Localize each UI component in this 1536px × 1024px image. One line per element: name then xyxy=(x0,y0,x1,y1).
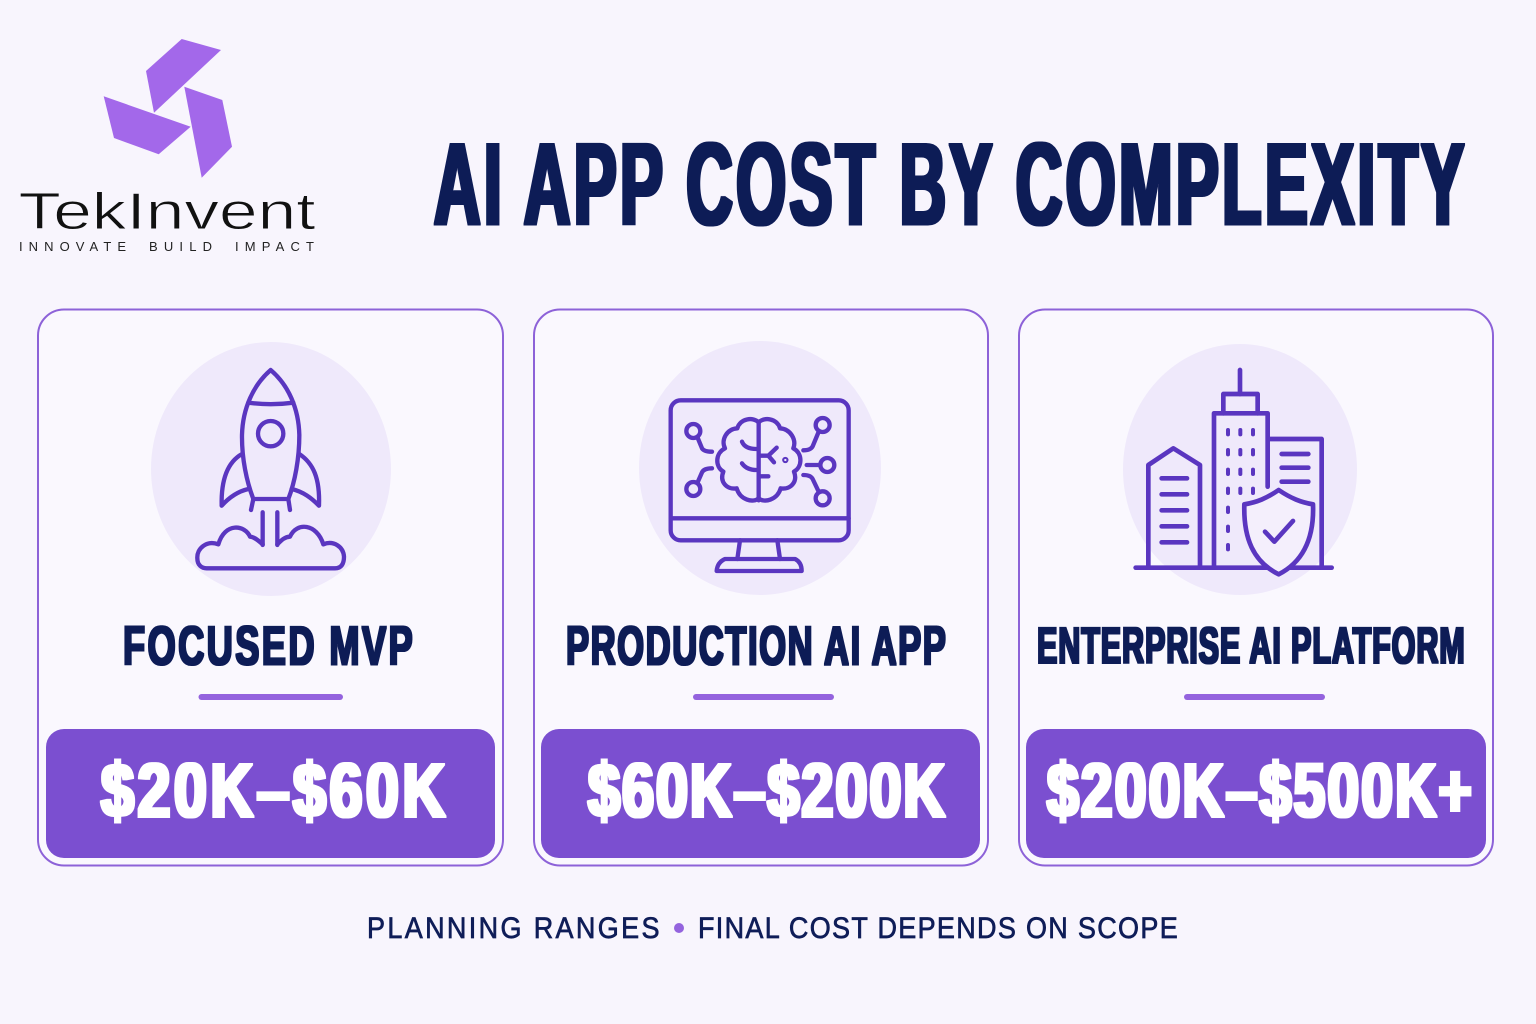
footer note xyxy=(367,912,1178,945)
footer note: FINAL COST DEPENDS ON SCOPE xyxy=(698,912,1178,945)
logo tagline xyxy=(19,239,314,254)
logo: TekInvent xyxy=(18,39,316,254)
price bar: $200K–$500K+ xyxy=(1026,729,1486,858)
heading: Focused MVP: FOCUSED MVP xyxy=(123,615,413,676)
icon: monitor with AI brain xyxy=(639,341,881,595)
panel: Production AI App xyxy=(534,310,988,866)
price bar: $60K–$200K: $60K–$200K xyxy=(588,748,945,834)
logo tagline: IMPACT xyxy=(235,239,314,254)
price bar: $20K–$60K: $20K–$60K xyxy=(101,748,445,834)
logo mark xyxy=(104,39,232,178)
heading: Production AI App: PRODUCTION AI APP xyxy=(566,614,946,676)
logo wordmark: TekInvent xyxy=(18,183,316,241)
logo tagline: INNOVATE xyxy=(19,239,126,254)
logo tagline: BUILD xyxy=(149,239,212,254)
panel: Focused MVP xyxy=(38,310,503,866)
title: AI APP COST BY COMPLEXITY xyxy=(434,120,1464,251)
panel: Enterprise AI Platform xyxy=(1019,310,1493,866)
price bar: $20K–$60K xyxy=(46,729,495,858)
icon: rocket launch xyxy=(151,342,391,596)
icon: city buildings with shield xyxy=(1123,344,1357,595)
price bar: $200K–$500K+: $200K–$500K+ xyxy=(1047,749,1472,834)
price bar: $60K–$200K xyxy=(541,729,980,858)
heading: Enterprise AI Platform: ENTERPRISE AI PLATFORM xyxy=(1037,617,1465,674)
footer note: PLANNING RANGES xyxy=(367,912,660,945)
